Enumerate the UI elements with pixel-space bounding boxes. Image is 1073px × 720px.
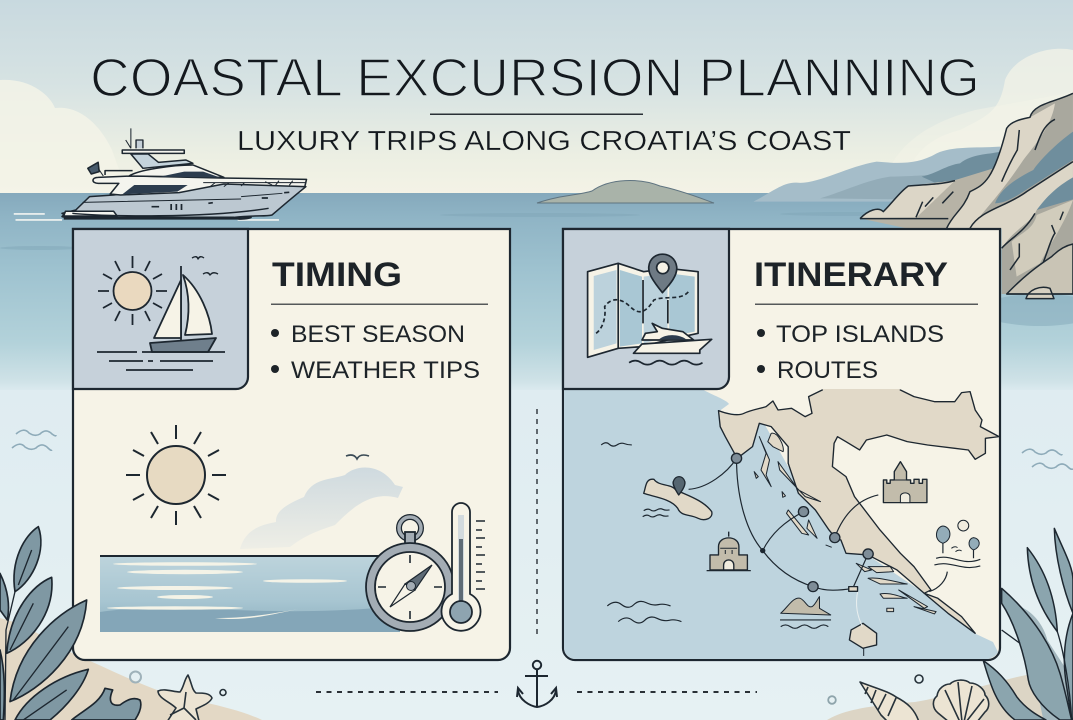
distant hills	[753, 147, 1000, 202]
left side waves	[12, 430, 56, 450]
timing icon tile	[73, 229, 248, 389]
plants: bottom right	[983, 528, 1073, 720]
front rock	[1007, 244, 1073, 294]
icon: starfish	[158, 675, 212, 720]
front-left headland	[860, 168, 993, 228]
timing bullet list: WEATHER TIPS	[291, 357, 480, 384]
icon: tile sun	[98, 256, 167, 325]
subtitle: LUXURY TRIPS ALONG CROATIA’S COAST	[237, 125, 851, 156]
distant island	[537, 181, 714, 203]
itinerary divider	[755, 304, 978, 305]
itinerary icon tile	[563, 229, 729, 389]
title: COASTAL EXCURSION PLANNING	[90, 48, 980, 108]
timing bullet list: BEST SEASON	[291, 321, 465, 348]
center dashed path	[536, 409, 538, 636]
castle	[883, 462, 927, 503]
cliffs	[860, 93, 1073, 299]
icon: scallop shell	[933, 680, 989, 720]
route stops	[731, 453, 873, 592]
icon: thermometer	[441, 503, 485, 631]
title divider	[430, 114, 643, 115]
panel: timing	[73, 229, 510, 660]
plants: bottom left	[0, 527, 141, 720]
bubble small left	[220, 690, 226, 696]
leaves	[14, 527, 41, 592]
yacht	[14, 128, 307, 220]
timing heading: TIMING	[272, 256, 402, 294]
mainland	[718, 390, 999, 593]
sea on map	[564, 389, 998, 659]
pin	[673, 477, 685, 495]
lower leaf	[983, 661, 1046, 720]
sand right	[827, 665, 1073, 720]
timing divider	[271, 304, 488, 305]
panel: itinerary	[563, 229, 1000, 660]
coastal strip	[924, 593, 975, 633]
background: lower shallows	[0, 390, 1073, 720]
icon: sailboat	[97, 257, 225, 370]
background: sea	[0, 193, 1073, 393]
bubble top right	[915, 675, 923, 683]
itinerary bullet list	[757, 321, 944, 384]
lower beige ledges	[970, 162, 1073, 250]
timing card	[73, 229, 510, 660]
dark scrub bands	[995, 132, 1073, 203]
water scene	[100, 556, 400, 632]
icon: anchor	[517, 661, 557, 707]
bubble bottom center right	[828, 696, 836, 704]
bottom dashed line left	[316, 691, 498, 693]
timing bullet list	[271, 321, 480, 384]
church	[707, 532, 751, 571]
icon: cone shell	[860, 682, 919, 720]
itinerary bullet list: ROUTES	[777, 357, 878, 384]
icon: large sun	[126, 425, 226, 525]
itinerary bullet list: TOP ISLANDS	[776, 321, 944, 348]
right side waves	[1022, 449, 1073, 469]
bubble left	[130, 672, 141, 682]
cliff outlines	[947, 93, 1073, 228]
icon: folded map	[588, 254, 712, 365]
routes	[689, 458, 947, 592]
background: sky	[0, 0, 1073, 195]
background: clouds	[0, 49, 1073, 194]
main cliff base	[947, 93, 1073, 294]
map of Croatia	[601, 390, 999, 656]
park icon	[934, 540, 980, 568]
itinerary card	[563, 229, 1000, 660]
bottom dashed line right	[577, 691, 757, 693]
waves	[601, 443, 681, 623]
ruin island icon	[781, 597, 831, 615]
cloud	[240, 467, 403, 549]
upright leaves	[1027, 548, 1057, 632]
sand left	[0, 618, 262, 720]
sweeping leaf	[1002, 588, 1072, 720]
icon: compass	[366, 517, 454, 631]
inland islands	[754, 433, 936, 614]
shaded backdrop leaf	[1020, 607, 1073, 720]
upper beige ledge	[947, 103, 1055, 228]
icon: bird	[346, 455, 369, 459]
sea streaks	[0, 212, 1073, 326]
far islands	[644, 479, 712, 520]
itinerary heading: ITINERARY	[754, 256, 948, 294]
